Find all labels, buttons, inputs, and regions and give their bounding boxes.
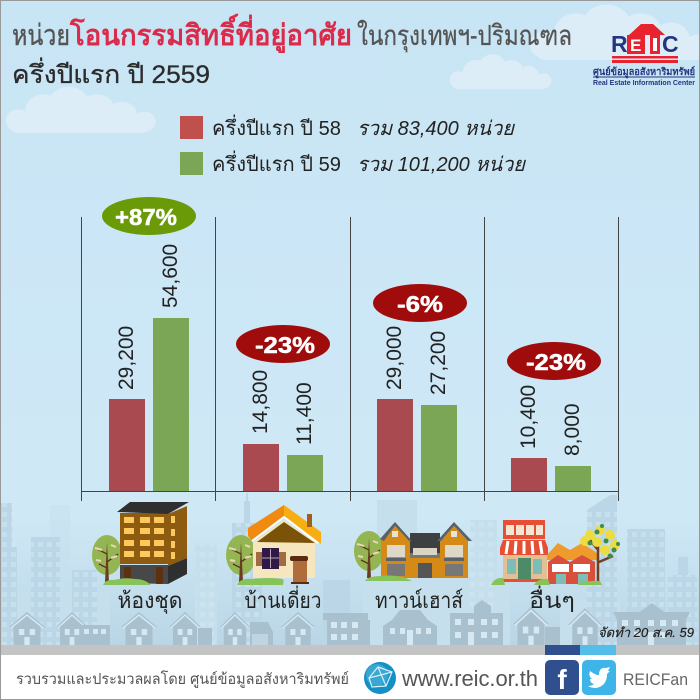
clouds (6, 4, 700, 133)
legend total 2559: รวม 101,200 หน่วย (357, 154, 526, 176)
footer credit: รวบรวมและประมวลผลโดย ศูนย์ข้อมูลอสังหาริมทรัพย์ (16, 670, 349, 688)
change badge +87%: +87% (115, 204, 177, 230)
date note: จัดทำ 20 ส.ค. 59 (598, 625, 694, 640)
change badge +87% (102, 197, 196, 235)
change badge -23% other (507, 342, 601, 380)
title location: ในกรุงเทพฯ-ปริมณฑล (357, 19, 572, 53)
bar values: 11,400 (293, 382, 316, 445)
bar values: 29,000 (383, 326, 406, 390)
logo: E (630, 36, 641, 55)
change badge -23% detached: -23% (255, 332, 315, 358)
bar values: 8,000 (561, 403, 584, 456)
logo: C (662, 31, 679, 57)
title: หน่วย (12, 20, 70, 52)
legend swatch 2558 (180, 116, 203, 139)
icon: twitter (582, 660, 616, 695)
logo (593, 24, 695, 87)
bar values: 54,600 (159, 244, 182, 308)
legend swatch 2559 (180, 152, 203, 175)
bar chart (81, 217, 619, 501)
chart axes (81, 217, 619, 501)
logo: Real Estate Information Center (593, 78, 695, 87)
bars: other (511, 458, 591, 491)
logo: R (611, 31, 628, 57)
icon: facebook (545, 660, 579, 695)
bar values: 29,200 (115, 326, 138, 390)
social handle: REICFan (623, 670, 688, 689)
footer white panel (0, 655, 700, 699)
icon: detached house (226, 505, 321, 585)
subtitle: ครึ่งปีแรก ปี 2559 (12, 57, 210, 89)
legend label 2559: ครึ่งปีแรก ปี 59 (212, 150, 341, 176)
footer (0, 645, 700, 699)
bar values: 27,200 (427, 331, 450, 395)
bar values (115, 244, 584, 456)
change badge -23% detached (236, 325, 330, 363)
logo: ศูนย์ข้อมูลอสังหาริมทรัพย์ (593, 66, 695, 79)
footer band (0, 645, 700, 656)
change badge -6% (373, 284, 467, 322)
title highlight: โอนกรรมสิทธิ์ที่อยู่อาศัย (69, 13, 352, 53)
label: detached house: บ้านเดี่ยว (244, 585, 322, 613)
bars: townhouse (377, 399, 457, 491)
row houses right (323, 600, 690, 645)
legend total 2558: รวม 83,400 หน่วย (357, 118, 515, 140)
city skyline (0, 493, 697, 645)
icon: townhouse (354, 522, 472, 581)
icon: facebook: f (557, 664, 567, 695)
change badge -6%: -6% (397, 291, 443, 317)
website: www.reic.or.th (401, 666, 538, 691)
change badge -23% other: -23% (526, 349, 586, 375)
label: condominium: ห้องชุด (118, 588, 182, 614)
bars: detached house (243, 444, 323, 491)
legend label 2558: ครึ่งปีแรก ปี 58 (212, 114, 341, 140)
bars: condominium (109, 318, 189, 491)
bar values: 14,800 (249, 370, 272, 434)
band tab: blue (545, 645, 580, 655)
label: other: อื่นๆ (529, 585, 575, 613)
legend (180, 114, 526, 176)
bar values: 10,400 (517, 385, 540, 449)
row of houses (9, 600, 690, 645)
icon: globe (364, 662, 396, 694)
icon: condominium (92, 502, 189, 585)
icon: other buildings (491, 520, 620, 585)
band tab: light blue (580, 645, 616, 655)
label: townhouse: ทาวน์เฮาส์ (375, 588, 463, 613)
